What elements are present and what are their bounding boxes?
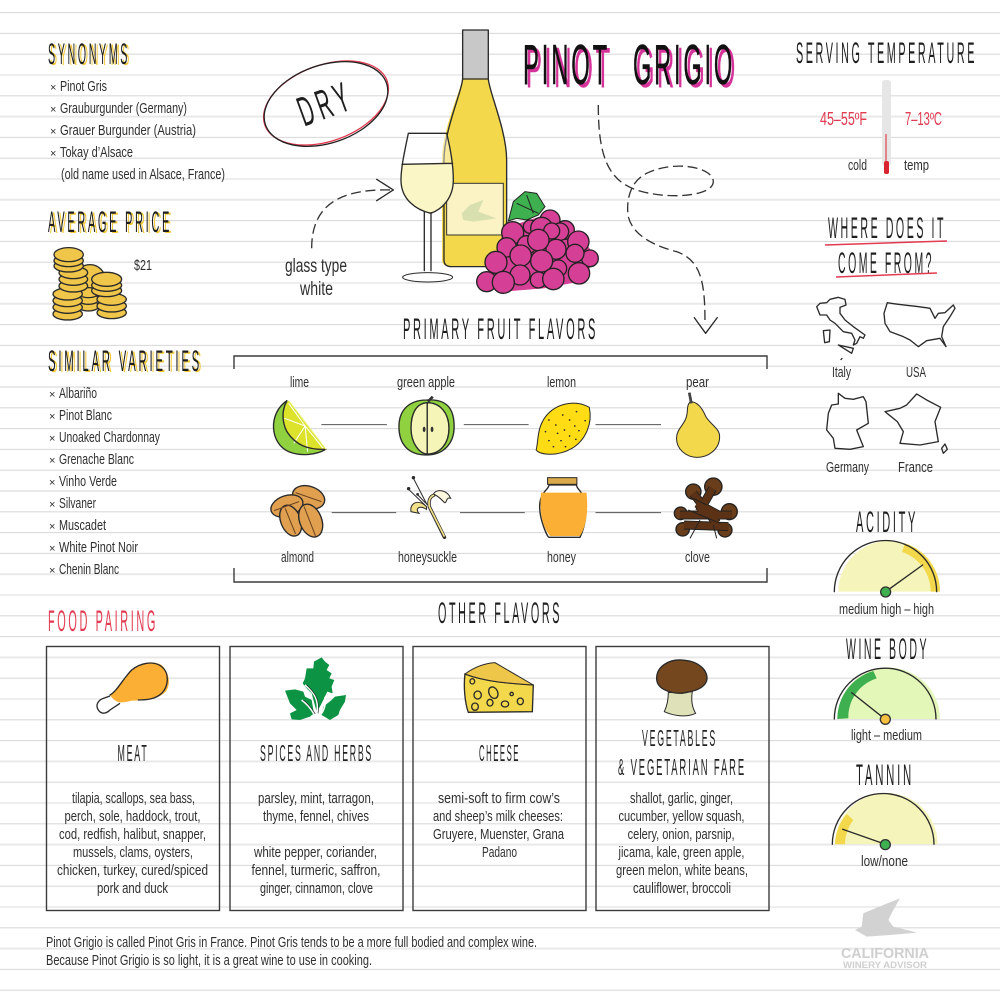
map: Italy <box>817 297 865 360</box>
varieties list: White Pinot Noir <box>59 539 138 556</box>
body value: light – medium <box>851 727 922 744</box>
logo: California Winery Advisor: WINERY ADVISOR <box>843 960 928 970</box>
varieties list: Muscadet <box>59 517 107 534</box>
spice pairings: parsley, mint, tarragon, <box>258 790 374 807</box>
synonyms list: Pinot Gris <box>60 78 107 95</box>
gauge: wine body <box>834 668 940 724</box>
country labels <box>826 364 933 476</box>
bracket bottom <box>234 568 767 582</box>
panel: serving temperature <box>796 37 977 174</box>
icon: chicken leg <box>97 663 169 713</box>
text: AVERAGE PRICE <box>48 206 172 239</box>
meat pairings: perch, sole, haddock, trout, <box>64 808 200 825</box>
varieties list: Grenache Blanc <box>59 451 134 468</box>
varieties list: × <box>49 565 55 577</box>
varieties list: Chenin Blanc <box>59 561 119 578</box>
temperatures: temp <box>904 157 929 174</box>
varieties list: × <box>49 477 55 489</box>
synonyms list: × <box>50 82 56 94</box>
panel: similar varieties <box>48 345 202 578</box>
badge: dry: DRY <box>291 72 360 135</box>
heading: vegetables <box>618 725 746 780</box>
synonyms list: (old name used in Alsace, France) <box>61 166 225 183</box>
panel: synonyms: SYNONYMS <box>48 38 130 71</box>
glass type label: glass type <box>285 256 347 277</box>
footer note: Pinot Grigio is called Pinot Gris in France. Pinot Gris tends to be a more full bodied and complex wine. <box>46 934 537 951</box>
icon: cloves <box>674 478 737 538</box>
spice pairings: fennel, turmeric, saffron, <box>252 862 380 879</box>
icon: mushroom <box>657 660 707 716</box>
connector lines <box>321 425 661 513</box>
country labels: France <box>898 459 933 476</box>
panel: acidity <box>834 506 940 618</box>
panel: cheese <box>413 646 586 910</box>
text: & VEGETARIAN FARE <box>618 754 746 780</box>
map: France <box>885 394 947 453</box>
map: Germany <box>827 393 868 449</box>
spice pairings: thyme, fennel, chives <box>263 808 369 825</box>
icon: thermometer <box>882 80 891 174</box>
panel: meat <box>46 646 346 910</box>
varieties list: Pinot Blanc <box>59 407 112 424</box>
flavor labels: pear <box>686 374 709 391</box>
text: GRIGIO <box>633 33 735 97</box>
varieties list: × <box>49 411 55 423</box>
varieties list: Vinho Verde <box>59 473 117 490</box>
varieties list: × <box>49 543 55 555</box>
panel: average price <box>48 206 172 320</box>
hero illustration: dry badge, bottle, glass, grapes <box>252 30 598 293</box>
panel: vegetables <box>596 646 769 910</box>
cheese pairings <box>433 790 564 861</box>
cheese pairings: and sheep’s milk cheeses: <box>433 808 563 825</box>
arrow: dashed looping path <box>598 105 717 333</box>
varieties list: × <box>49 455 55 467</box>
varieties list: × <box>49 499 55 511</box>
panel: flavors <box>234 313 767 630</box>
glass type label <box>285 256 347 300</box>
vegetable pairings: celery, onion, parsnip, <box>628 826 735 843</box>
vegetable pairings: shallot, garlic, ginger, <box>630 790 733 807</box>
heading: where does it come from <box>825 212 947 280</box>
varieties list: Unoaked Chardonnay <box>59 429 160 446</box>
synonyms list: Grauer Burgunder (Austria) <box>60 122 196 139</box>
gauge: acidity <box>834 540 940 597</box>
meat pairings: pork and duck <box>97 880 168 897</box>
panel: cheese: CHEESE <box>479 740 520 766</box>
flavor labels: clove <box>685 549 710 566</box>
panel: synonyms <box>48 38 225 183</box>
price: $21 <box>134 257 152 274</box>
varieties list: Albariño <box>59 385 97 402</box>
synonyms list: Grauburgunder (Germany) <box>60 100 187 117</box>
icon: almonds <box>268 482 328 540</box>
varieties list: × <box>49 389 55 401</box>
spice pairings: white pepper, coriander, <box>253 844 377 861</box>
flavor labels: lemon <box>547 374 576 391</box>
vegetable pairings <box>616 790 748 897</box>
logo: California Winery Advisor: CALIFORNIA <box>841 945 929 962</box>
panel: wine body <box>834 633 940 744</box>
flavor labels: green apple <box>397 374 455 391</box>
tannin value: low/none <box>861 853 908 870</box>
icon: wine glass <box>401 133 453 282</box>
footer note <box>46 934 537 969</box>
map: USA <box>884 303 955 347</box>
badge: dry <box>252 45 400 162</box>
logo: California Winery Advisor <box>841 898 929 970</box>
cheese pairings: Gruyere, Muenster, Grana <box>433 826 564 843</box>
flavor labels: honey <box>547 549 576 566</box>
synonyms list <box>50 78 225 183</box>
acidity value: medium high – high <box>839 601 934 618</box>
icon: lime <box>274 401 326 455</box>
icon: parsley <box>285 657 346 720</box>
temperatures: 7–13ºC <box>905 109 942 129</box>
flavor labels <box>281 374 710 566</box>
synonyms list: Tokay d’Alsace <box>60 144 133 161</box>
country labels: Germany <box>826 459 869 476</box>
spice pairings <box>252 790 380 897</box>
country labels: Italy <box>832 364 851 381</box>
icon: coin stacks <box>53 248 126 320</box>
arrow: to glass <box>312 179 393 248</box>
gauge: tannin <box>832 793 938 850</box>
icon: honey jar <box>540 478 587 537</box>
synonyms list: × <box>50 126 56 138</box>
icon: wine bottle <box>442 30 507 267</box>
panel: flavors: OTHER FLAVORS <box>438 597 562 630</box>
varieties list <box>49 385 160 578</box>
cheese pairings: Padano <box>482 844 517 861</box>
vegetable pairings: cauliflower, broccoli <box>633 880 731 897</box>
varieties list: × <box>49 521 55 533</box>
glass type label: white <box>299 279 333 300</box>
temperatures <box>820 109 942 174</box>
text: SPICES AND HERBS <box>260 740 373 766</box>
cheese pairings: semi-soft to firm cow’s <box>438 790 560 807</box>
meat pairings: cod, redfish, halibut, snapper, <box>59 826 206 843</box>
flavor labels: honeysuckle <box>398 549 457 566</box>
flavor labels: lime <box>290 374 309 391</box>
icon: honeysuckle <box>407 476 451 537</box>
varieties list: Silvaner <box>59 495 96 512</box>
temperatures: 45–55ºF <box>820 109 867 129</box>
icon: grape bunch <box>477 192 598 293</box>
panel: meat: MEAT <box>118 740 148 766</box>
vegetable pairings: cucumber, yellow squash, <box>618 808 744 825</box>
flavor labels: almond <box>281 549 314 566</box>
country labels: USA <box>906 364 926 381</box>
panel: where does it come from <box>817 212 955 476</box>
title: PINOT <box>523 33 610 97</box>
icon: cheese wedge <box>464 663 533 712</box>
varieties list: × <box>49 433 55 445</box>
icon: green apple <box>399 397 454 455</box>
vegetable pairings: jicama, kale, green apple, <box>618 844 744 861</box>
text: FOOD PAIRING <box>48 605 158 638</box>
meat pairings: mussels, clams, oysters, <box>73 844 193 861</box>
panel: spices and herbs <box>230 646 403 910</box>
footer note: Because Pinot Grigio is so light, it is a great wine to use in cooking. <box>46 952 372 969</box>
temperatures: cold <box>848 157 867 174</box>
vegetable pairings: green melon, white beans, <box>616 862 748 879</box>
panel: flavors: PRIMARY FRUIT FLAVORS <box>403 313 598 346</box>
icon: pear <box>677 393 720 457</box>
text: SIMILAR VARIETIES <box>48 345 202 378</box>
meat pairings: tilapia, scallops, sea bass, <box>72 790 195 807</box>
panel: tannin <box>832 759 938 870</box>
synonyms list: × <box>50 104 56 116</box>
spice pairings: ginger, cinnamon, clove <box>260 880 373 897</box>
synonyms list: × <box>50 148 56 160</box>
bracket top <box>234 356 767 369</box>
heading: vegetables: VEGETABLES <box>642 725 717 751</box>
meat pairings <box>57 790 208 897</box>
meat pairings: chicken, turkey, cured/spiced <box>57 862 208 879</box>
icon: lemon <box>536 403 590 454</box>
